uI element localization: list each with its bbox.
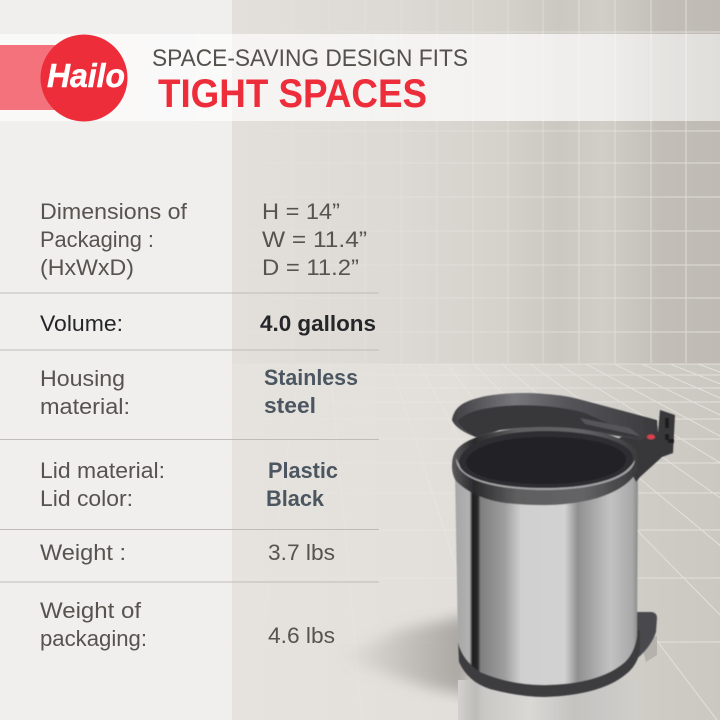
spec: weight of packaging xyxy=(40,598,335,651)
spec: housing material: Housing xyxy=(40,366,125,391)
spec: lid material and color: Plastic xyxy=(268,458,338,483)
bin metal body xyxy=(455,470,638,685)
bin opening xyxy=(459,431,633,488)
spec: housing material: Stainless xyxy=(264,365,358,390)
spec: lid material and color: Lid material: xyxy=(40,458,165,483)
spec: housing material xyxy=(40,365,358,419)
spec: dimensions of packaging: H = 14” xyxy=(262,199,340,224)
logo: Hailo xyxy=(40,34,128,122)
spec: dimensions of packaging: Dimensions of xyxy=(40,199,188,224)
bin red button xyxy=(647,434,655,440)
spec: volume xyxy=(40,311,376,336)
spec: dimensions of packaging: D = 11.2” xyxy=(262,255,359,280)
spec: lid material and color: Black xyxy=(266,486,325,511)
panel: left light column xyxy=(0,0,232,720)
spec: dimensions of packaging: W = 11.4” xyxy=(262,227,367,252)
illustration: stainless steel bin xyxy=(452,393,675,697)
bin mounting bracket xyxy=(615,410,675,482)
spec: weight of packaging: packaging: xyxy=(40,626,147,651)
row dividers xyxy=(0,293,379,582)
spec: dimensions of packaging: (HxWxD) xyxy=(40,255,134,280)
spec: weight xyxy=(40,540,335,565)
panel: tiled floor background xyxy=(232,364,720,720)
bin rim xyxy=(452,427,638,505)
title xyxy=(152,45,468,116)
bin lid underside xyxy=(458,405,640,438)
logo: Hailo: Hailo xyxy=(47,57,125,94)
title: TIGHT SPACES xyxy=(158,72,427,116)
spec: weight of packaging: Weight of xyxy=(40,598,142,623)
spec: housing material: steel xyxy=(264,393,316,418)
panel: tiled wall background xyxy=(232,0,720,364)
bin lid xyxy=(452,393,658,440)
red tab behind logo xyxy=(0,45,70,110)
floor shadow and reflection xyxy=(335,615,657,720)
bin foot plate xyxy=(630,612,657,664)
bin silver rim line xyxy=(456,458,635,490)
bin inner shadow xyxy=(466,437,626,484)
spec: weight of packaging: 4.6 lbs xyxy=(268,623,335,648)
bin lid hinge arm xyxy=(580,418,640,436)
spec: lid material and color: Lid color: xyxy=(40,486,133,511)
bin base ring xyxy=(458,630,640,697)
spec: weight: Weight : xyxy=(40,540,126,565)
spec: dimensions of packaging xyxy=(40,199,367,280)
spec: weight: 3.7 lbs xyxy=(268,540,335,565)
header band xyxy=(0,34,720,121)
spec: dimensions of packaging: Packaging : xyxy=(40,227,154,252)
spec: volume: 4.0 gallons xyxy=(260,311,376,336)
spec: lid material and color xyxy=(40,458,338,511)
spec: housing material: material: xyxy=(40,394,130,419)
bin bracket slots xyxy=(665,418,674,443)
spec: volume: Volume: xyxy=(40,311,123,336)
title: SPACE-SAVING DESIGN FITS xyxy=(152,45,468,72)
